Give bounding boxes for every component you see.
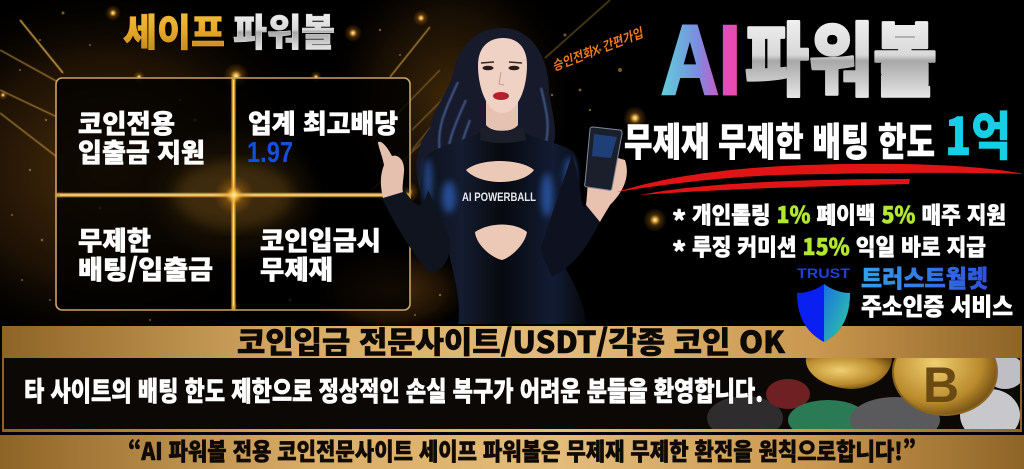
illustration: bitcoins and casino chips: B [923, 357, 959, 413]
feature: no sanctions on coin deposit [260, 221, 381, 287]
raised hand [378, 142, 404, 198]
feature: unlimited betting [78, 221, 213, 287]
title: 파워볼 [233, 2, 335, 57]
signup note in orange handwriting: 승인전화X 간편가입 [550, 25, 647, 74]
icon: shield [797, 284, 850, 342]
trust wallet badge: TRUST [797, 265, 850, 281]
feature: unlimited betting: 배팅/입출금 [78, 250, 213, 287]
background: gold glow and light rays [0, 0, 622, 360]
arm with thumb up [382, 190, 450, 274]
feature: unlimited betting: 무제한 [78, 221, 151, 258]
banner: coin deposit: 코인입금 전문사이트/USDT/각종 코인 OK [237, 318, 786, 362]
title [123, 2, 335, 57]
glossy highlights on suit [424, 157, 576, 217]
headline: betting limit: 무제재 무제한 배팅 한도 [624, 112, 935, 168]
illustration: bitcoins and casino chips [707, 358, 1020, 429]
phone [585, 127, 622, 190]
arm holding phone [540, 155, 600, 277]
panel: feature grid [56, 77, 410, 310]
face [478, 38, 527, 113]
feature: coin only deposits: 입출금 지원 [78, 133, 205, 170]
illustration: woman in black suit holding phone [378, 28, 627, 324]
bullet two: 루징 커미션 15% 익일 바로 지급 [692, 228, 986, 262]
chest logo: AI POWERBALL [462, 190, 536, 204]
trust wallet badge: 트러스트월렛 [861, 259, 988, 294]
logo: AI powerball: 파워볼 [745, 0, 937, 113]
title: 세이프 [123, 2, 225, 57]
bullet two: * [672, 231, 686, 270]
trust wallet badge: 주소인증 서비스 [861, 287, 1013, 322]
feature: coin only deposits: 코인전용 [78, 104, 175, 141]
panel: welcome message: 타 사이트의 배팅 한도 제한으로 정상적인 손실 복구가 어려운 분들을 환영합니다. [24, 370, 763, 409]
chest cutouts [466, 161, 534, 182]
neck and collar [486, 100, 518, 131]
bullet list [672, 196, 1006, 270]
feature: coin only deposits [78, 104, 205, 170]
trust wallet badge [797, 259, 1013, 342]
feature: highest odds [247, 104, 398, 169]
feature: highest odds: 업계 최고배당 [248, 104, 398, 141]
feature: no sanctions on coin deposit: 무제재 [260, 250, 333, 287]
headline: betting limit: 1억 [945, 95, 1011, 170]
feature: highest odds: 1.97 [247, 137, 293, 169]
red brush stroke [617, 164, 1024, 195]
gold dust specks [11, 12, 622, 321]
logo: AI powerball: AI [661, 5, 741, 115]
panel: welcome message [4, 358, 1020, 429]
body [420, 130, 586, 324]
hair back [416, 28, 555, 215]
feature: no sanctions on coin deposit: 코인입금시 [260, 221, 381, 258]
banner: closing slogan: “AI 파워볼 전용 코인전문사이트 세이프 파워볼은 무제재 무제한 환전을 원칙으로합니다!” [128, 432, 916, 467]
logo: AI powerball [661, 0, 937, 115]
sparkles [0, 5, 667, 312]
bullet one: 개인롤링 1% 페이백 5% 매주 지원 [692, 196, 1006, 230]
banner: coin deposit [2, 318, 1022, 432]
bullet one: * [672, 200, 686, 239]
